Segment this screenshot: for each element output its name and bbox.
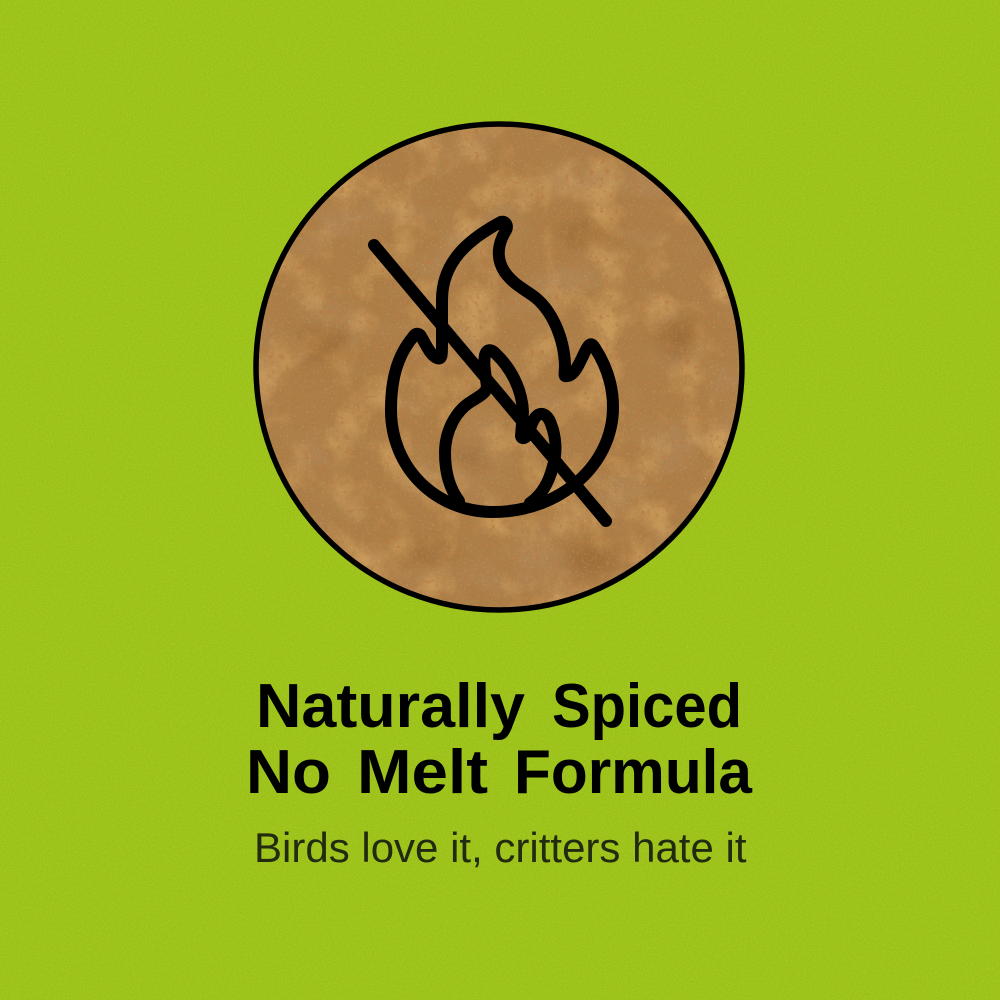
icon part: outer flame	[391, 222, 613, 512]
icon: crossed-out flame	[374, 222, 613, 521]
heading line 2: Melt	[357, 738, 488, 807]
icon part: inner flame	[445, 350, 555, 503]
heading line 2: Formula	[514, 738, 752, 807]
panel: textured suet disc	[250, 120, 750, 620]
heading	[246, 672, 752, 807]
heading line 1: Naturally	[256, 672, 526, 741]
heading line 1: Spiced	[552, 672, 742, 741]
subtitle: Birds love it, critters hate it	[254, 824, 747, 871]
icon part: slash	[374, 245, 606, 521]
heading line 2: No	[246, 738, 331, 807]
